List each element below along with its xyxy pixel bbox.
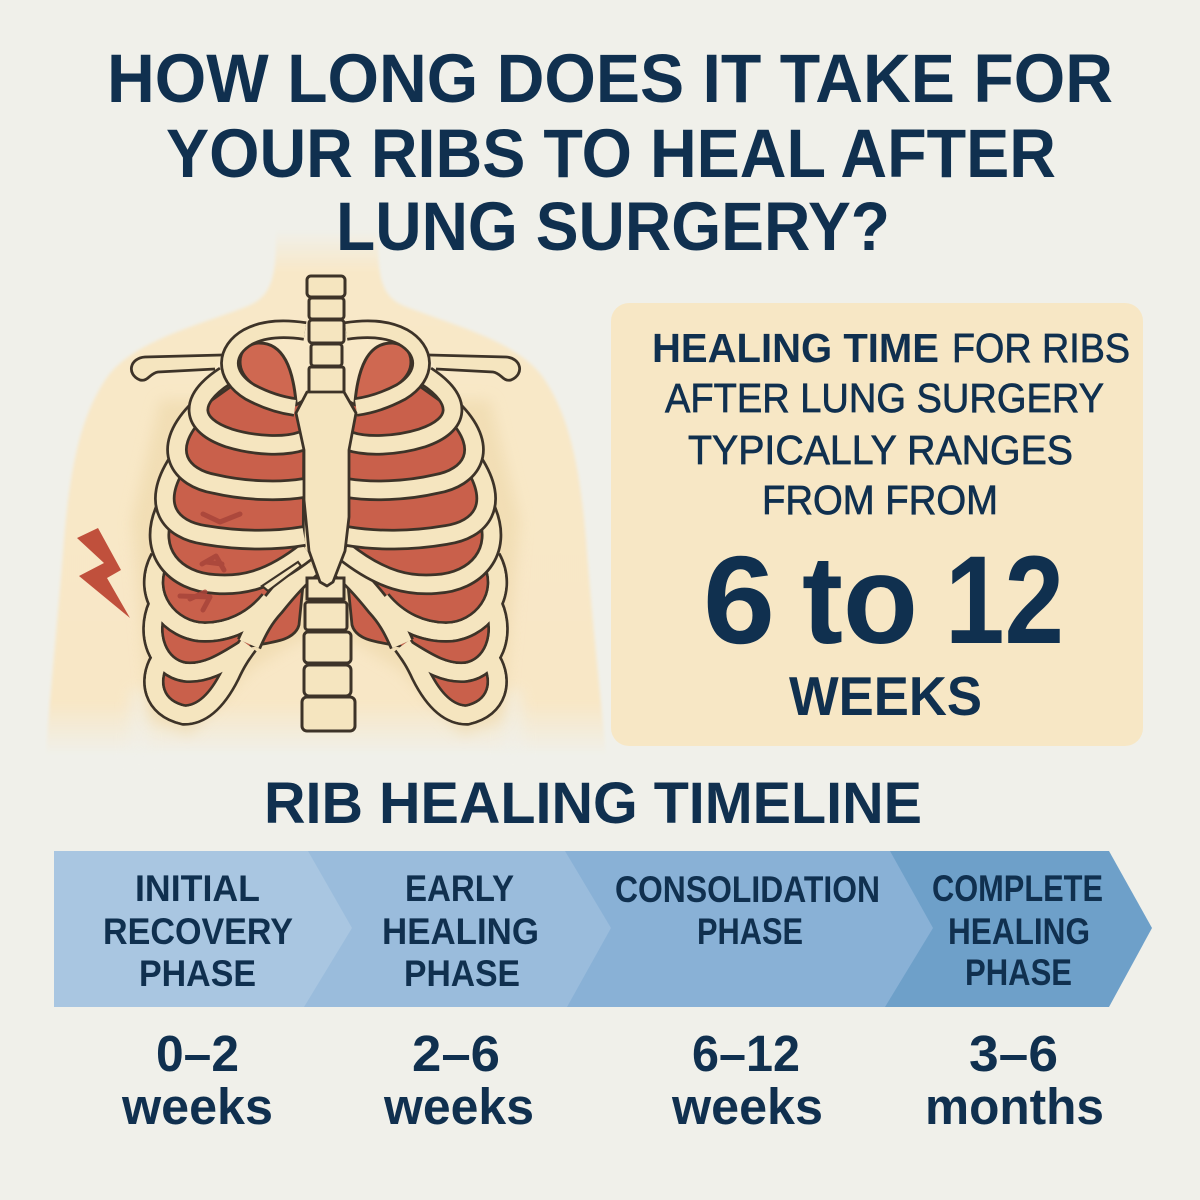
summary text: FOR RIBS [952, 325, 1130, 371]
duration: phase 3: 6–12 [692, 1025, 800, 1082]
summary text: FROM FROM [762, 477, 998, 523]
costal slot on left side [262, 562, 301, 591]
title: HOW LONG DOES IT TAKE FOR [107, 40, 1113, 117]
duration: phase 2: 2–6 [412, 1025, 500, 1082]
torso silhouette [46, 230, 606, 755]
unit: WEEKS [789, 665, 982, 727]
lower spine vertebrae [302, 578, 355, 731]
phase 3 label [615, 869, 880, 952]
phase 2 label: HEALING [382, 911, 539, 952]
duration: phase 1: weeks [121, 1078, 273, 1135]
key figure: 6 [703, 531, 775, 670]
durations [121, 1025, 1104, 1135]
phase 1 arrow [54, 851, 352, 1007]
phase 4 label: HEALING [948, 911, 1090, 952]
duration: phase 1 [121, 1025, 273, 1135]
right half of rib cage and lung [340, 329, 520, 715]
phase 2 label [382, 868, 539, 994]
left half of rib cage and lung [131, 329, 311, 715]
injury marks on left lung [180, 514, 240, 610]
duration: phase 2: weeks [383, 1078, 534, 1135]
duration: phase 1: 0–2 [156, 1025, 239, 1082]
duration: phase 3: weeks [671, 1078, 823, 1135]
summary text: AFTER LUNG SURGERY [665, 375, 1104, 421]
summary text [652, 325, 1130, 523]
timeline chevrons [54, 851, 1152, 1007]
duration: phase 3 [671, 1025, 823, 1135]
duration: phase 2 [383, 1025, 534, 1135]
phase 1 label: INITIAL [135, 868, 260, 909]
key figure: to [802, 531, 918, 670]
key figure: 12 [945, 531, 1064, 670]
phase 1 label [103, 868, 293, 994]
phase 1 label: PHASE [139, 953, 256, 994]
sternum [296, 392, 356, 586]
panel background [611, 303, 1143, 746]
phase 3 label: CONSOLIDATION [615, 869, 880, 910]
title: YOUR RIBS TO HEAL AFTER [166, 115, 1056, 192]
duration: phase 4: 3–6 [969, 1025, 1058, 1082]
phase 4 label: COMPLETE [932, 868, 1103, 909]
phase 2 label: EARLY [405, 868, 514, 909]
duration: phase 4 [925, 1025, 1104, 1135]
icon: pain lightning bolt [77, 528, 130, 618]
phase 2 label: PHASE [404, 953, 520, 994]
upper spine vertebrae [307, 276, 345, 393]
phase 4 arrow [885, 851, 1152, 1007]
arm and torso gaps [128, 690, 524, 760]
phase 2 arrow [304, 851, 611, 1007]
phase 4 label [932, 868, 1103, 993]
phase 3 label: PHASE [697, 911, 803, 952]
phase 3 arrow [565, 851, 933, 1007]
key figure [703, 531, 1064, 670]
summary text: TYPICALLY RANGES [688, 427, 1073, 473]
phase 4 label: PHASE [965, 952, 1072, 993]
shading around rib cage [132, 400, 520, 735]
summary text: HEALING TIME [652, 325, 939, 371]
illustration: torso with rib cage [46, 230, 606, 760]
timeline heading: RIB HEALING TIMELINE [264, 771, 922, 836]
title [107, 40, 1113, 265]
duration: phase 4: months [925, 1078, 1104, 1135]
phase 1 label: RECOVERY [103, 911, 293, 952]
panel: healing time summary [611, 303, 1143, 746]
title: LUNG SURGERY? [336, 188, 890, 265]
